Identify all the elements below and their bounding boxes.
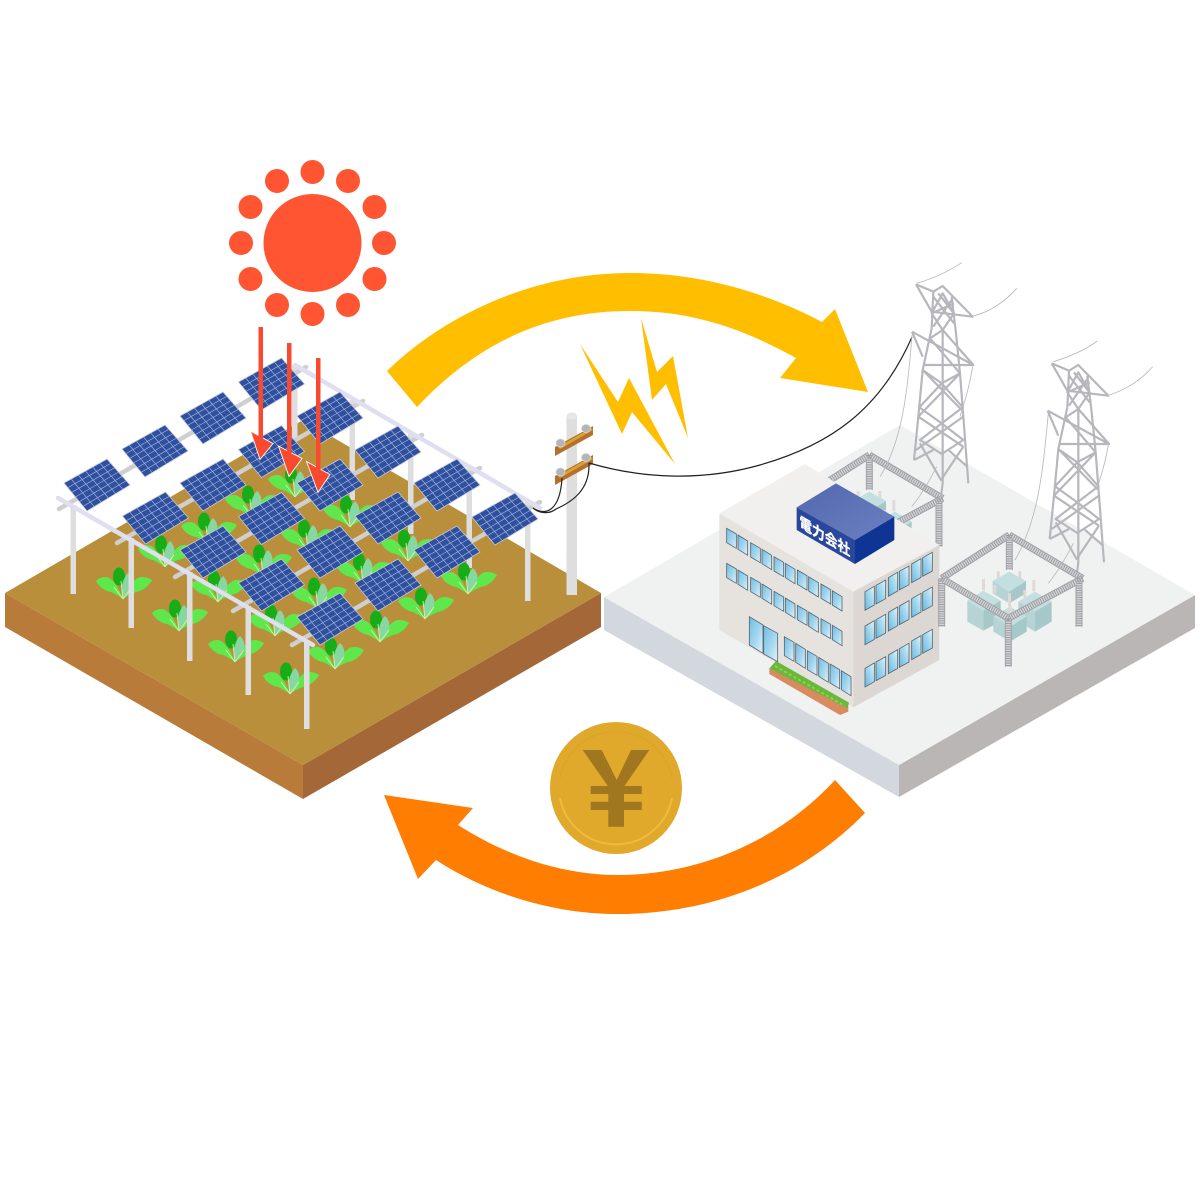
- rooftop company sign box: [797, 483, 894, 564]
- power company ground block: [604, 425, 1195, 797]
- rooftop company sign box: 電力会社: [799, 514, 850, 560]
- right wall windows: [865, 552, 932, 687]
- arrow: electricity sold (yellow): [387, 273, 868, 407]
- solar panels: [64, 358, 538, 645]
- utility pole: [555, 412, 593, 595]
- left wall windows: [727, 528, 851, 696]
- tower 2 and front substation: [942, 341, 1153, 667]
- icon: sun: [229, 160, 396, 326]
- icon: lightning bolts: [580, 318, 688, 464]
- entrance door: [749, 617, 778, 662]
- planter: [769, 661, 849, 715]
- arrow: payment (orange): [384, 780, 865, 914]
- transmission tower 1: [880, 263, 1017, 507]
- back support poles: [292, 365, 530, 601]
- front support poles: [70, 505, 310, 729]
- crop plants: [96, 466, 497, 694]
- farm ground block: [5, 420, 601, 799]
- substation frame with transformers: [942, 535, 1083, 667]
- office building: [719, 464, 939, 715]
- icon: yen coin: [550, 722, 682, 854]
- sunlight arrows: [250, 327, 330, 492]
- support rails: [58, 365, 540, 645]
- rear substation frame: [802, 455, 943, 587]
- transmission tower 2: [1015, 341, 1153, 583]
- transmission towers and substation: [802, 263, 1017, 587]
- power lines: [533, 337, 912, 513]
